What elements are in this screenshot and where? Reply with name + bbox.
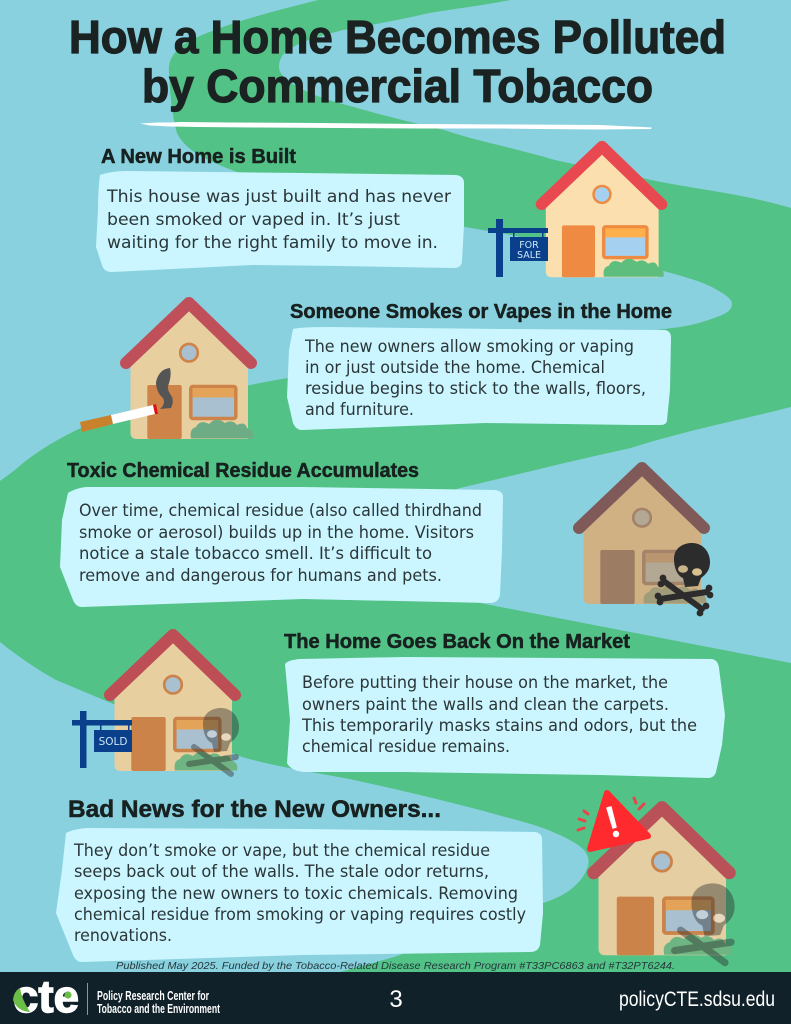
- icon: sold sign: [72, 711, 132, 768]
- text block 1: [106, 187, 451, 252]
- heading: back on the market: The Home Goes Back On the Market: [284, 631, 630, 653]
- panel: text box 1: [96, 171, 464, 272]
- section 3: toxic chemical residue accumulates: [60, 460, 503, 607]
- house 3: [579, 468, 706, 604]
- text block 4: [301, 673, 697, 756]
- heading: bad news: Bad News for the New Owners...: [68, 796, 441, 823]
- text block 1: This house was just built and has never: [106, 187, 451, 206]
- skull and crossbones: [655, 543, 713, 616]
- funding note: Published May 2025. Funded by the Tobacco-Related Disease Research Program #T33PC6863 and #T32PT6244.: [116, 960, 675, 972]
- text block 2: [304, 337, 646, 419]
- text block 4: Before putting their house on the market, the: [302, 673, 668, 692]
- cigarette: [80, 404, 158, 432]
- icon: house for sale with faded skull: [110, 635, 239, 774]
- text block 2: The new owners allow smoking or vaping: [304, 337, 634, 356]
- page number: 3: [389, 986, 403, 1013]
- center name: Policy Research Center for: [97, 988, 209, 1003]
- text block 3: smoke or aerosol) builds up in the home. Visitors: [79, 523, 474, 542]
- icon: house with cigarette: [80, 303, 253, 439]
- section 2: someone smokes or vapes: [287, 301, 672, 430]
- icon: for sale sign: [488, 219, 548, 277]
- center name: [97, 988, 220, 1016]
- white brush underline: [140, 122, 652, 130]
- icon: for sale sign: FOR: [519, 240, 539, 251]
- section 5: bad news for the new owners: [56, 796, 543, 962]
- section 1: a new home is built: [96, 146, 464, 272]
- logo: cte: cte: [13, 971, 79, 1022]
- house 5: [594, 808, 732, 955]
- section 4: the home goes back on the market: [284, 631, 725, 778]
- icon: sold sign: SOLD: [99, 736, 127, 748]
- text block 5: chemical residue from smoking or vaping requires costly: [74, 905, 526, 924]
- house 2: [126, 303, 253, 439]
- heading: a new home is built: A New Home is Built: [101, 146, 296, 168]
- text block 3: Over time, chemical residue (also called thirdhand: [79, 501, 482, 520]
- text block 2: in or just outside the home. Chemical: [305, 358, 605, 377]
- text block 5: seeps back out of the walls. The stale odor returns,: [74, 862, 489, 881]
- smoke: [156, 368, 173, 409]
- panel: text box 5: [56, 828, 543, 962]
- panel: text box 3: [60, 487, 503, 607]
- footer bar: [0, 971, 791, 1024]
- title: [69, 11, 726, 112]
- icon: for sale sign: SALE: [517, 250, 541, 261]
- text block 5: renovations.: [74, 926, 172, 945]
- text block 5: exposing the new owners to toxic chemicals. Removing: [74, 884, 518, 903]
- text block 3: notice a stale tobacco smell. It’s difficult to: [79, 544, 432, 563]
- text block 2: and furniture.: [305, 400, 414, 419]
- text block 5: [73, 841, 526, 945]
- faded skull: [675, 883, 735, 963]
- text block 1: waiting for the right family to move in.: [107, 233, 438, 252]
- text block 3: [79, 501, 482, 585]
- alert triangle: [578, 793, 648, 849]
- text block 3: remove and dangerous for humans and pets.: [79, 566, 442, 585]
- text block 4: This temporarily masks stains and odors, but the: [301, 716, 697, 735]
- title: How a Home Becomes Polluted: [69, 11, 726, 63]
- center name: Tobacco and the Environment: [97, 1001, 220, 1016]
- text block 4: chemical residue remains.: [302, 737, 510, 756]
- panel: text box 4: [285, 657, 725, 778]
- text block 2: residue begins to stick to the walls, floors,: [305, 379, 646, 398]
- house 4: [110, 635, 237, 771]
- text block 4: owners paint the walls and clean the carpets.: [302, 695, 669, 714]
- icon: bright new house: [542, 147, 664, 277]
- heading: toxic residue: Toxic Chemical Residue Accumulates: [67, 460, 419, 482]
- icon: house with alert and skull: [578, 793, 735, 963]
- text block 1: been smoked or vaped in. It’s just: [107, 210, 401, 229]
- title: by Commercial Tobacco: [142, 60, 653, 112]
- faded skull: [189, 708, 239, 774]
- panel: text box 2: [287, 327, 671, 430]
- heading: someone smokes or vapes: Someone Smokes or Vapes in the Home: [290, 301, 672, 323]
- icon: contaminated house with skull: [579, 468, 713, 616]
- text block 5: They don’t smoke or vape, but the chemical residue: [73, 841, 490, 860]
